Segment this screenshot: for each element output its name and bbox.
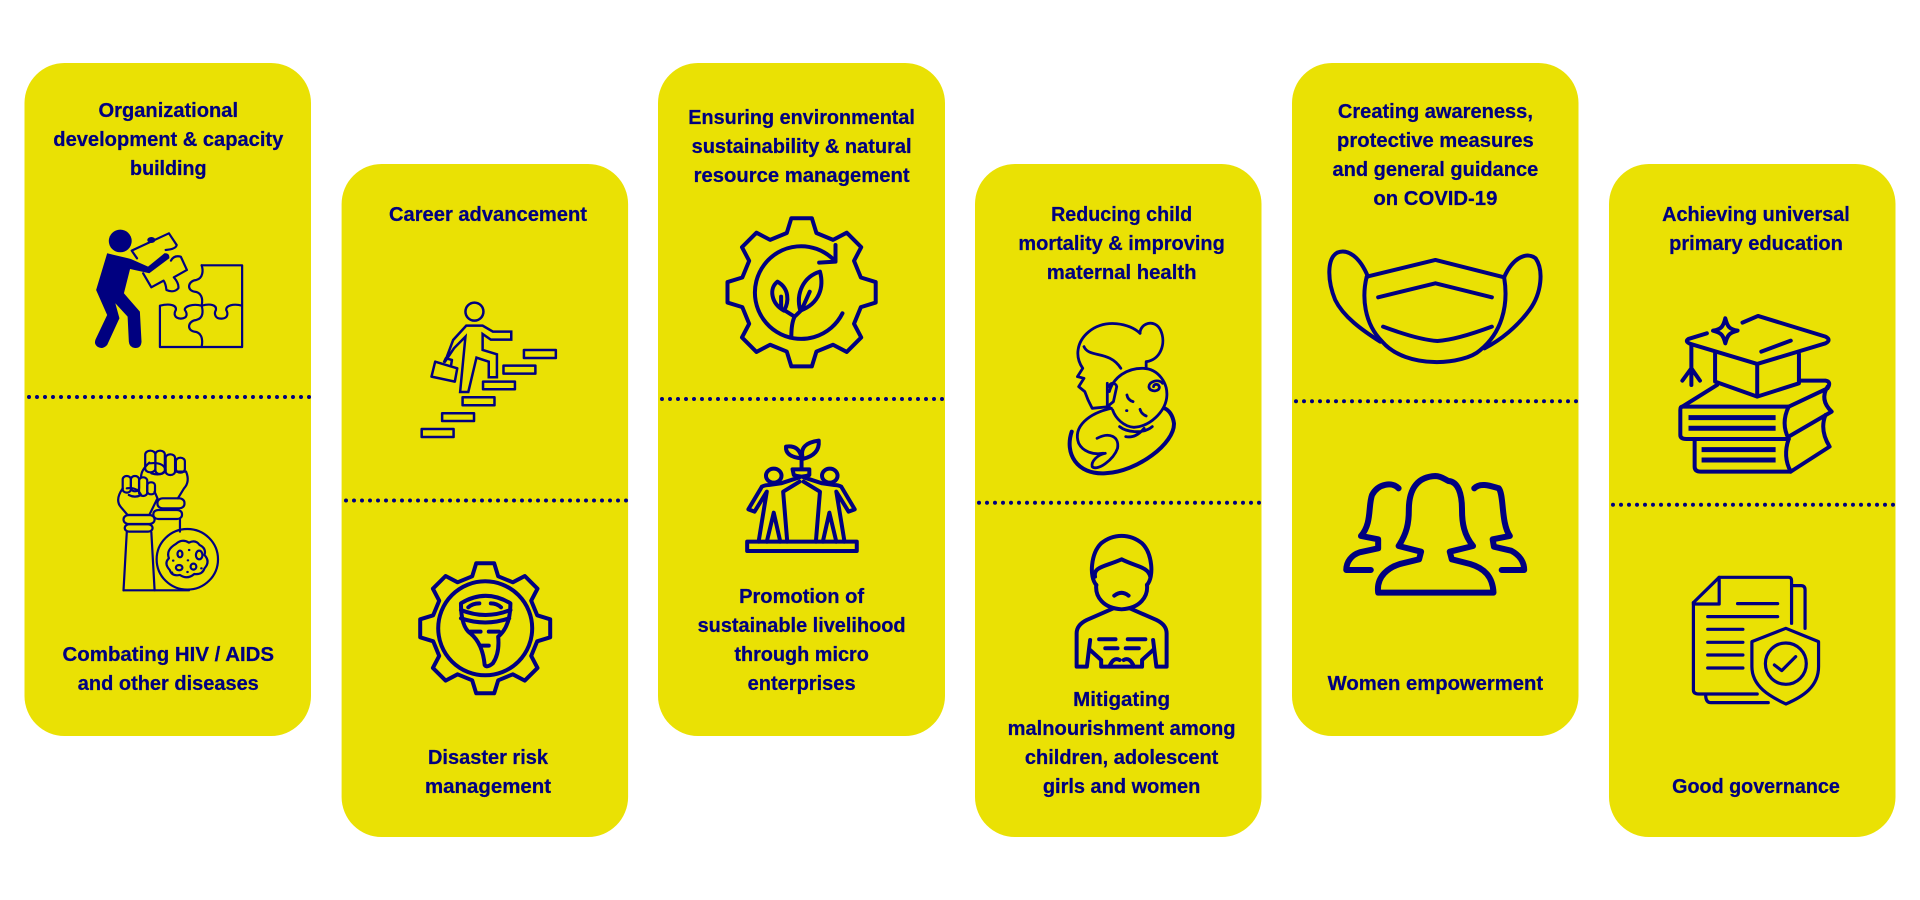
card background 3 (658, 63, 945, 736)
heading: sustainable livelihood: enterprises (748, 673, 856, 695)
heading: sustainable livelihood: sustainable livelihood (698, 615, 906, 637)
heading: combating HIV: and other diseases (78, 673, 259, 695)
icon: three women (1346, 476, 1524, 593)
heading: universal primary education (1662, 204, 1850, 255)
icon: graduation cap on books (1680, 316, 1832, 472)
panel: environment and livelihood (658, 63, 945, 736)
heading: disaster risk management: management (425, 776, 551, 798)
icon: person assembling puzzle (95, 230, 242, 348)
heading: COVID-19 guidance: on COVID-19 (1373, 188, 1497, 210)
heading: good governance: Good governance (1672, 776, 1840, 798)
card background 2 (342, 164, 628, 837)
card background 4 (975, 164, 1262, 837)
heading: disaster risk management (425, 747, 551, 798)
icon: document with shield (1693, 577, 1819, 704)
heading: universal primary education: Achieving universal (1662, 204, 1850, 226)
heading: sustainable livelihood: Promotion of (739, 586, 864, 608)
heading: career advancement: Career advancement (389, 204, 587, 226)
heading: mitigating malnourishment: girls and women (1043, 776, 1200, 798)
heading: COVID-19 guidance: Creating awareness, (1338, 101, 1533, 123)
heading: COVID-19 guidance: and general guidance (1333, 159, 1538, 181)
heading: COVID-19 guidance (1333, 101, 1538, 210)
heading: COVID-19 guidance: protective measures (1337, 130, 1534, 152)
panel: child mortality and malnourishment (975, 164, 1262, 837)
icon: face mask (1329, 252, 1541, 362)
panel: education and governance (1609, 164, 1896, 837)
heading: organizational development: Organizational (99, 100, 238, 122)
card background 5 (1292, 63, 1578, 736)
heading: mitigating malnourishment: children, adolescent (1025, 747, 1219, 769)
panel: career and disaster risk (342, 164, 628, 837)
heading: organizational development (53, 100, 284, 180)
heading: women empowerment: Women empowerment (1328, 673, 1543, 695)
icon: raised fists and virus (118, 451, 218, 590)
heading: child mortality: maternal health (1047, 262, 1196, 284)
heading: mitigating malnourishment: malnourishment among (1008, 718, 1236, 740)
icon: leaf in gear (728, 218, 876, 366)
heading: disaster risk management: Disaster risk (428, 747, 549, 769)
heading: environmental sustainability: sustainability & natural (692, 136, 912, 158)
card background 6 (1609, 164, 1896, 837)
icon: person climbing stairs (422, 303, 556, 437)
heading: child mortality: Reducing child (1051, 204, 1192, 226)
heading: environmental sustainability (688, 107, 915, 187)
heading: environmental sustainability: Ensuring environmental (688, 107, 915, 129)
heading: mitigating malnourishment: Mitigating (1073, 689, 1170, 711)
heading: sustainable livelihood: through micro (734, 644, 869, 666)
heading: combating HIV (63, 644, 274, 695)
heading: organizational development: building (130, 158, 207, 180)
heading: universal primary education: primary education (1669, 233, 1843, 255)
icon: tornado in gear (420, 563, 550, 693)
heading: child mortality: mortality & improving (1018, 233, 1225, 255)
card background 1 (24, 63, 311, 736)
heading: mitigating malnourishment (1008, 689, 1236, 798)
heading: combating HIV: Combating HIV / AIDS (63, 644, 274, 666)
heading: organizational development: development & capacity (53, 129, 284, 151)
heading: sustainable livelihood (698, 586, 906, 695)
icon: malnourished child (1077, 536, 1167, 667)
icon: two people raising a sprout (747, 441, 857, 551)
panel: COVID-19 and women empowerment (1292, 63, 1578, 736)
heading: environmental sustainability: resource management (694, 165, 910, 187)
panel: organizational development and HIV (24, 63, 311, 736)
icon: mother holding baby (1070, 323, 1174, 473)
heading: child mortality (1018, 204, 1225, 284)
